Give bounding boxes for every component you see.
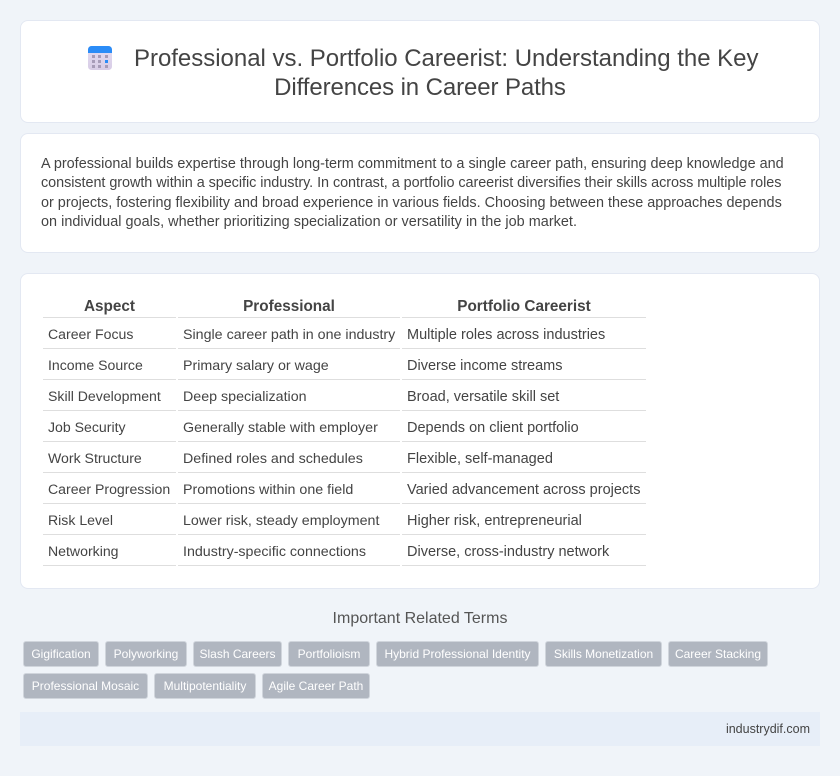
- row: Work Structure: Flexible, self-managed: [407, 451, 553, 467]
- row: Career Focus: [48, 326, 605, 343]
- comparison table: [43, 298, 646, 566]
- panel: intro: [20, 133, 820, 253]
- icon: calendar: [88, 46, 112, 70]
- row: Income Source: Diverse income streams: [407, 358, 563, 374]
- title: Differences in Career Paths: [274, 74, 566, 101]
- row: Risk Level: [48, 512, 582, 529]
- panel: title card: [20, 20, 820, 123]
- tag: Multipotentiality: [164, 679, 246, 693]
- intro text: [41, 156, 784, 230]
- row: Income Source: Primary salary or wage: [183, 358, 329, 374]
- intro text: consistent growth within a specific industry. In contrast, a portfolio careerist diversifies their skills across multiple roles: [41, 175, 781, 191]
- row: Work Structure: Defined roles and schedules: [183, 451, 363, 467]
- tag: [23, 673, 148, 699]
- tag: Slash Careers: [199, 647, 276, 661]
- row: Skill Development: Broad, versatile skill set: [407, 389, 559, 405]
- row: Job Security: Job Security: [48, 419, 126, 435]
- footer text: industrydif.com: [726, 722, 810, 736]
- tag: [545, 641, 662, 667]
- row: Job Security: [48, 419, 579, 436]
- row: Job Security: Depends on client portfolio: [407, 420, 579, 436]
- tag: Polyworking: [114, 647, 178, 661]
- tag: [23, 641, 99, 667]
- row: Risk Level: Higher risk, entrepreneurial: [407, 513, 582, 529]
- row: Skill Development: Deep specialization: [183, 389, 307, 405]
- row: Career Progression: [48, 481, 640, 498]
- row: Career Focus: Career Focus: [48, 326, 133, 342]
- row: Work Structure: [48, 450, 553, 467]
- row: Income Source: Income Source: [48, 357, 143, 373]
- intro text: or projects, fostering flexibility and broad experience in various fields. Choosing between these approaches depends: [41, 195, 782, 211]
- row: Income Source: [48, 357, 563, 374]
- intro text: on individual goals, whether prioritizing specialization or versatility in the job market.: [41, 214, 577, 230]
- heading: related terms: Important Related Terms: [333, 610, 507, 627]
- header row: [84, 298, 591, 315]
- tag: Gigification: [31, 647, 91, 661]
- tag: [288, 641, 370, 667]
- tag: Skills Monetization: [554, 647, 653, 661]
- tag: Professional Mosaic: [32, 679, 139, 693]
- row: Career Progression: Career Progression: [48, 481, 170, 497]
- row: Networking: Networking: [48, 543, 118, 559]
- tag: Career Stacking: [675, 647, 761, 661]
- tag: [193, 641, 282, 667]
- tag: Agile Career Path: [269, 679, 363, 693]
- tag list: [23, 641, 768, 699]
- row: Networking: Diverse, cross-industry network: [407, 544, 609, 560]
- tag: [154, 673, 256, 699]
- tag: [668, 641, 768, 667]
- row: Career Focus: Multiple roles across industries: [407, 327, 605, 343]
- tag: [376, 641, 539, 667]
- footer bar: [20, 712, 820, 746]
- row: Networking: [48, 543, 610, 560]
- title: Professional vs. Portfolio Careerist: Understanding the Key: [134, 45, 758, 72]
- row: Skill Development: [48, 388, 560, 405]
- tag: Hybrid Professional Identity: [384, 647, 531, 661]
- intro text: A professional builds expertise through long-term commitment to a single career path, ensuring deep knowledge and: [41, 156, 784, 172]
- panel: comparison table: [20, 273, 820, 589]
- tag: [262, 673, 370, 699]
- row: Networking: Industry-specific connections: [183, 544, 366, 560]
- header row: Portfolio Careerist: [457, 298, 591, 315]
- row: Risk Level: Risk Level: [48, 512, 113, 528]
- header row: Professional: [243, 298, 335, 315]
- title: [134, 45, 758, 101]
- tag: [105, 641, 187, 667]
- row: Risk Level: Lower risk, steady employment: [183, 513, 379, 529]
- row: Work Structure: Work Structure: [48, 450, 142, 466]
- row: Career Progression: Promotions within one field: [183, 482, 353, 498]
- tag: Portfolioism: [298, 647, 360, 661]
- header row: Aspect: [84, 298, 135, 315]
- row: Career Focus: Single career path in one industry: [183, 327, 395, 343]
- row: Job Security: Generally stable with employer: [183, 420, 378, 436]
- row: Skill Development: Skill Development: [48, 388, 161, 404]
- row: Career Progression: Varied advancement across projects: [407, 482, 640, 498]
